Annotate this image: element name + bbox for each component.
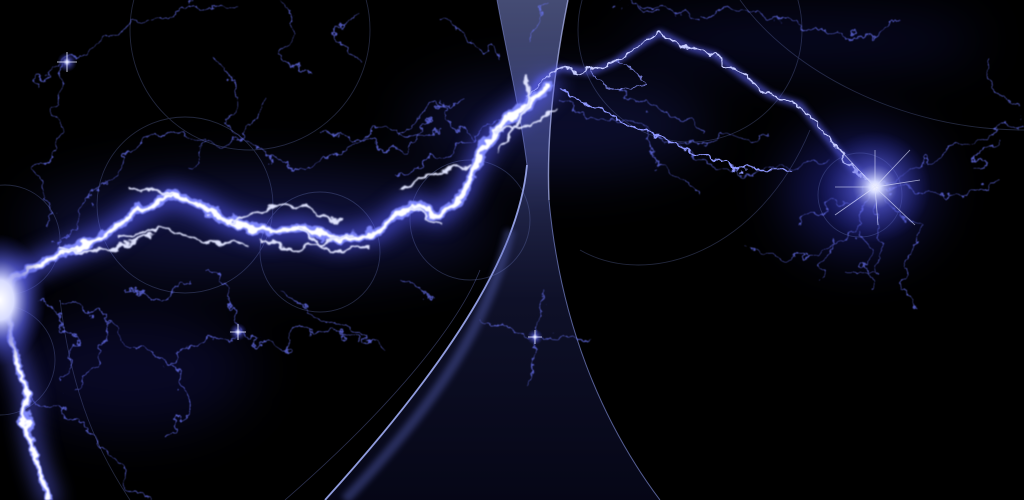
- small star: lower centre: [527, 329, 543, 345]
- lower left lightning bolt: [5, 290, 50, 500]
- small star: top left: [57, 52, 77, 72]
- small star: lower left: [229, 323, 247, 341]
- star burst: right node: [819, 131, 931, 243]
- upper lightning branch: [520, 33, 875, 187]
- main lightning bolt: [0, 75, 555, 290]
- ambient blue haze: [10, 10, 980, 430]
- funnel shaped translucent band: [285, 0, 660, 500]
- glow: left source: [0, 234, 46, 366]
